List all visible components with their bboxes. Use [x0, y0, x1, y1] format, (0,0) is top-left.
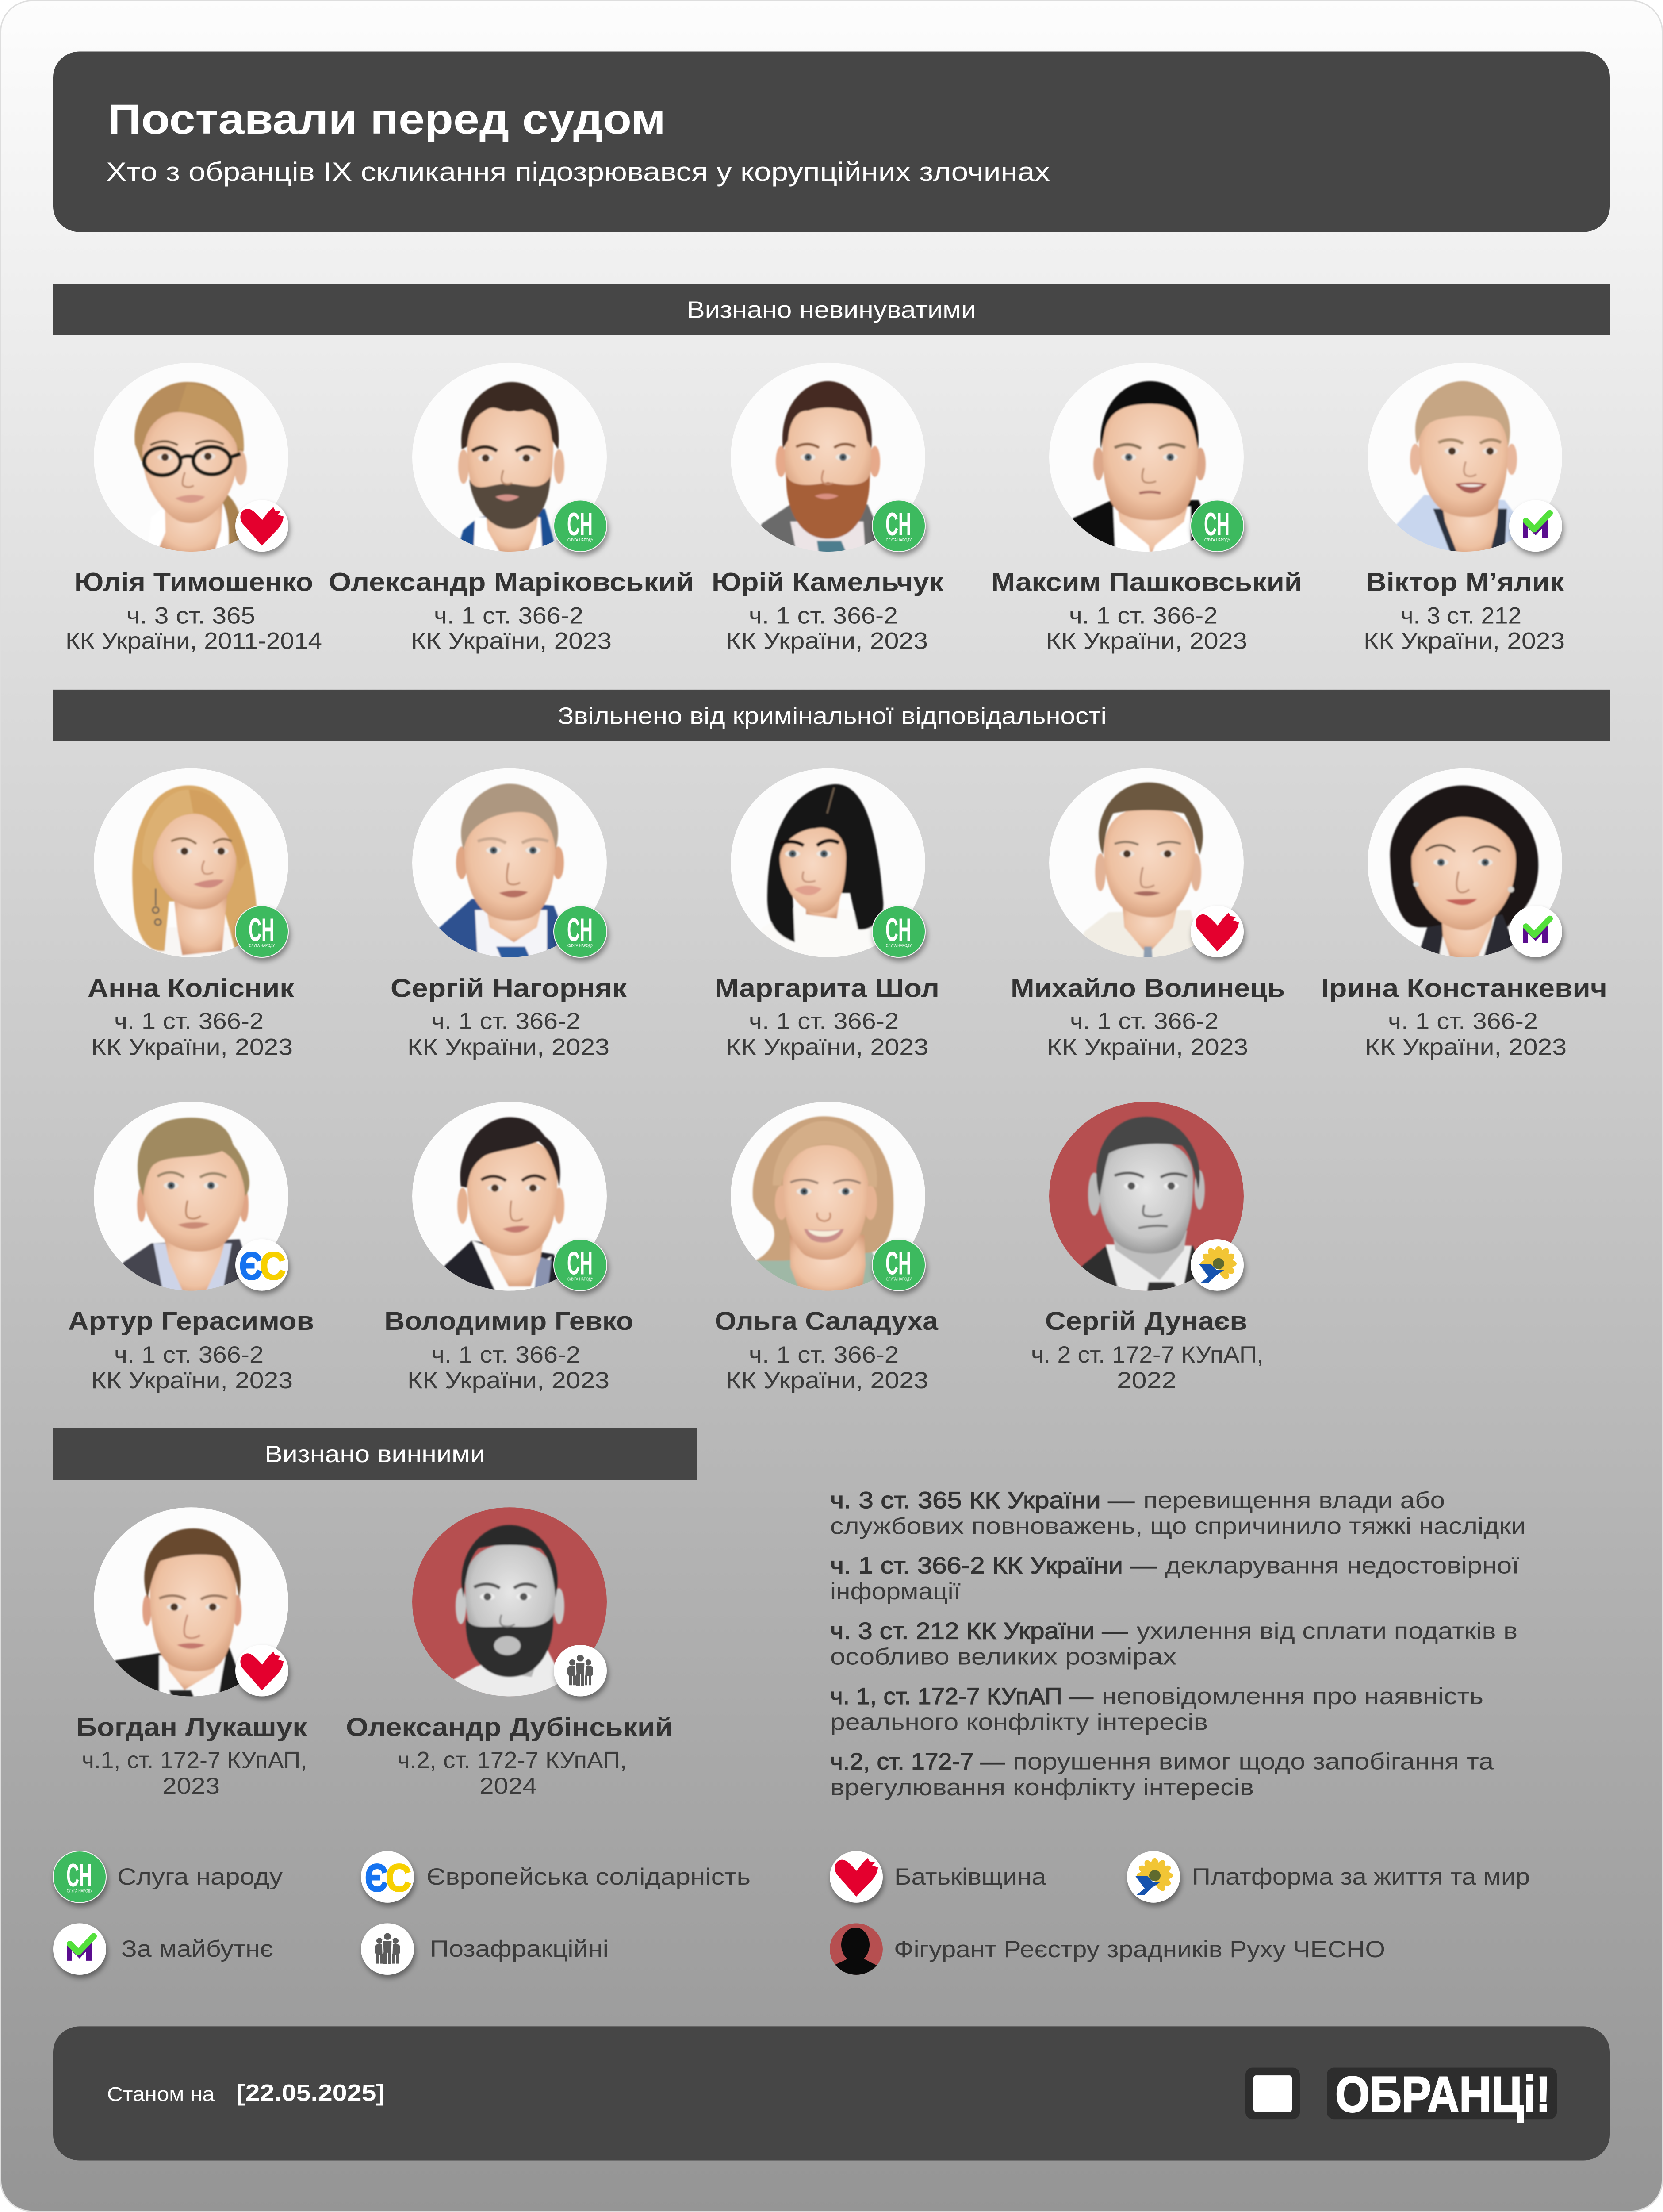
person: Артур Герасимов: [68, 1102, 314, 1394]
header panel: [53, 52, 1610, 232]
party badge: СН: [567, 912, 593, 948]
legend: [53, 1851, 1530, 1976]
portrait: [731, 768, 925, 962]
definition: ч. 3 ст. 212: особливо великих розмірах: [830, 1644, 1176, 1670]
definition: ч. 1, ст. 172-7: [830, 1684, 1483, 1735]
definition: ч. 1, ст. 172-7: реального конфлікту інтересів: [830, 1709, 1208, 1735]
party badge: СН: [1204, 506, 1230, 542]
charge: ч. 1 ст. 366-2: [749, 1009, 899, 1034]
party badge: СЛУГА НАРОДУ: [886, 944, 912, 949]
definition: ч. 1 ст. 366-2: ч. 1 ст. 366-2 КК України —: [830, 1553, 1157, 1579]
person: Юлія Тимошенко: [65, 363, 322, 654]
logo: ОБРАНЦі!: [1245, 2066, 1557, 2123]
charge: ч. 1 ст. 366-2: [749, 603, 898, 629]
portrait: [94, 1102, 288, 1295]
party badge: СЛУГА НАРОДУ: [1204, 538, 1230, 543]
party badge: [1509, 906, 1562, 957]
name: Олександр Дубінський: [346, 1713, 673, 1742]
section band: released from liability: Звільнено від кримінальної відповідальності: [558, 703, 1107, 729]
name: Михайло Волинець: [1011, 973, 1285, 1002]
charge: [407, 1009, 609, 1060]
legend item: Платформа за життя та мир: Платформа за життя та мир: [1192, 1864, 1530, 1890]
charge: [1031, 1342, 1264, 1394]
charge: ч. 1 ст. 366-2: [749, 1342, 899, 1368]
person: Володимир Гевко: [384, 1102, 633, 1394]
definition: ч.2, ст. 172-7: порушення вимог щодо запобігання та: [1013, 1749, 1494, 1774]
legend item: Батьківщина: [830, 1851, 1046, 1903]
legend item: Фігурант Реєстру зрадників: [830, 1923, 1385, 1976]
date value: [22.05.2025]: [237, 2080, 385, 2106]
party badge: [235, 1239, 288, 1291]
charge: ч. 3 ст. 212: [1401, 603, 1521, 629]
charge: КК України, 2023: [1364, 628, 1565, 654]
party badge: [235, 500, 288, 552]
party badge: СЛУГА НАРОДУ: [249, 944, 275, 949]
charge: 2024: [479, 1774, 537, 1799]
portrait: [1368, 363, 1562, 556]
definition: ч. 3 ст. 365: службових повноважень, що спричинило тяжкі наслідки: [830, 1513, 1526, 1539]
person: Олександр Маріковський: [329, 363, 694, 654]
portrait: [1049, 1102, 1244, 1295]
date label: Станом на: [107, 2083, 215, 2105]
definition: ч. 3 ст. 212: ухилення від сплати податків в: [1137, 1618, 1517, 1644]
party badge: СН: [249, 912, 274, 948]
name: Олександр Маріковський: [329, 567, 694, 596]
name: Маргарита Шол: [715, 973, 939, 1002]
charge: ч.1, ст. 172-7 КУпАП,: [82, 1747, 307, 1774]
party badge: [554, 500, 607, 552]
definition: ч. 1, ст. 172-7: неповідомлення про наявність: [1102, 1684, 1483, 1709]
charge: [1047, 1009, 1248, 1060]
party badge: СН: [567, 506, 593, 542]
charge: [82, 1747, 307, 1799]
portrait: [1368, 768, 1562, 962]
definition: ч.2, ст. 172-7: ч.2, ст. 172-7 —: [830, 1749, 1005, 1774]
name: Максим Пашковський: [991, 567, 1302, 596]
charge: ч. 1 ст. 366-2: [434, 603, 583, 629]
party badge: СЛУГА НАРОДУ: [567, 538, 594, 543]
section band: found guilty: Визнано винними: [264, 1441, 485, 1467]
legend item: Європейська солідарність: [361, 1851, 751, 1903]
charge: ч. 1 ст. 366-2: [114, 1009, 264, 1034]
footer panel: [53, 2026, 1610, 2160]
section band: acquitted: [53, 284, 1610, 335]
party badge: СЛУГА НАРОДУ: [567, 1277, 594, 1282]
definition: ч. 3 ст. 365: перевищення влади або: [1143, 1488, 1445, 1513]
name: Сергій Нагорняк: [391, 973, 627, 1002]
person: Сергій Дунаєв: [1031, 1102, 1264, 1394]
charge: КК України, 2023: [1365, 1034, 1567, 1060]
charge: [1365, 1009, 1567, 1060]
name: Анна Колісник: [88, 973, 294, 1002]
portrait: [412, 1507, 607, 1701]
charge: [726, 603, 928, 654]
party badge: СЛУГА НАРОДУ: [886, 1277, 912, 1282]
charge: КК України, 2023: [91, 1368, 293, 1394]
portrait: [94, 1507, 288, 1701]
name: Ольга Саладуха: [715, 1306, 939, 1336]
person: Максим Пашковський: [991, 363, 1302, 654]
name: Богдан Лукашук: [76, 1713, 307, 1742]
charge: ч. 1 ст. 366-2: [431, 1009, 580, 1034]
portrait: [412, 363, 607, 556]
portrait: [412, 768, 607, 962]
portrait: [94, 768, 288, 962]
charge: ч. 1 ст. 366-2: [1070, 1009, 1219, 1034]
charge: КК України, 2023: [726, 1368, 928, 1394]
charge: 2023: [162, 1774, 220, 1799]
charge: ч. 1 ст. 366-2: [1388, 1009, 1538, 1034]
name: Артур Герасимов: [68, 1306, 314, 1336]
name: Ірина Констанкевич: [1321, 973, 1607, 1002]
definition: ч. 3 ст. 365: ч. 3 ст. 365 КК України —: [830, 1488, 1135, 1513]
name: Юлія Тимошенко: [74, 567, 313, 596]
charge: [411, 603, 612, 654]
definition: ч. 1 ст. 366-2: декларування недостовірної: [1165, 1553, 1519, 1579]
charge: [91, 1342, 293, 1394]
person: Михайло Волинець: [1011, 768, 1285, 1060]
charge: 2022: [1117, 1368, 1176, 1394]
party badge: Є: [239, 1244, 262, 1287]
party badge: СН: [885, 1245, 911, 1281]
party badge: СН: [885, 912, 911, 948]
party badge: [235, 1645, 288, 1696]
charge: ч. 2 ст. 172-7 КУпАП,: [1031, 1342, 1264, 1368]
charge: КК України, 2023: [411, 628, 612, 654]
party badge: [872, 500, 925, 552]
portrait: [731, 1102, 925, 1295]
party badge: СЛУГА НАРОДУ: [567, 944, 594, 949]
charge: [407, 1342, 609, 1394]
charge: КК України, 2023: [1047, 1034, 1248, 1060]
party badge: СН: [885, 506, 911, 542]
definition: ч. 1 ст. 366-2: інформації: [830, 1579, 961, 1605]
charge: [726, 1342, 928, 1394]
section band: released from liability: [53, 690, 1610, 741]
charge: КК України, 2011-2014: [65, 628, 322, 654]
charge: КК України, 2023: [407, 1034, 609, 1060]
legend item: Європейська солідарність: Європейська солідарність: [426, 1864, 751, 1890]
legend item: Позафракційні: [361, 1923, 609, 1975]
party badge: [235, 906, 288, 957]
section band: found guilty: [53, 1428, 697, 1480]
party badge: [554, 1239, 607, 1291]
legend item: Європейська солідарність: Є: [365, 1856, 388, 1899]
section band: acquitted: Визнано невинуватими: [687, 297, 976, 323]
subtitle: Хто з обранців IX скликання підозрювався у корупційних злочинах: [106, 157, 1050, 187]
party badge: [1509, 500, 1562, 552]
definition: ч. 3 ст. 212: [830, 1618, 1517, 1670]
legend item: Слуга народу: СН: [66, 1857, 92, 1893]
charge: ч. 1 ст. 366-2: [1069, 603, 1218, 629]
name: Віктор М’ялик: [1366, 567, 1564, 596]
party badge: [1191, 1239, 1244, 1291]
charge: [397, 1747, 627, 1799]
charge: КК України, 2023: [1046, 628, 1247, 654]
legend item: За майбутнє: За майбутнє: [121, 1936, 273, 1962]
charge: ч. 1 ст. 366-2: [114, 1342, 264, 1368]
charge: [65, 603, 322, 654]
person: Маргарита Шол: [715, 768, 939, 1060]
party badge: [872, 1239, 925, 1291]
legend item: Платформа за життя та мир: [1127, 1851, 1530, 1903]
definition: ч.2, ст. 172-7: врегулювання конфлікту інтересів: [830, 1775, 1254, 1801]
party badge: [872, 906, 925, 957]
person: Ірина Констанкевич: [1321, 768, 1607, 1060]
party badge: СН: [567, 1245, 593, 1281]
definition: ч. 3 ст. 212: ч. 3 ст. 212 КК України —: [830, 1618, 1128, 1644]
charge: ч.2, ст. 172-7 КУпАП,: [397, 1747, 627, 1774]
party badge: СЛУГА НАРОДУ: [886, 538, 912, 543]
charge: [91, 1009, 293, 1060]
legend item: Батьківщина: Батьківщина: [894, 1864, 1046, 1890]
portrait: [412, 1102, 607, 1295]
name: Юрій Камельчук: [712, 567, 943, 596]
definition: ч. 1, ст. 172-7: ч. 1, ст. 172-7 КУпАП —: [830, 1684, 1094, 1709]
charge: КК України, 2023: [726, 628, 928, 654]
charge: [1364, 603, 1565, 654]
text block: legal definitions: [830, 1488, 1526, 1801]
legend item: Слуга народу: [53, 1851, 283, 1903]
logo: ОБРАНЦі!: ОБРАНЦі!: [1335, 2066, 1551, 2123]
person: Юрій Камельчук: [712, 363, 943, 654]
party badge: [1191, 906, 1244, 957]
definition: ч. 3 ст. 365: [830, 1488, 1526, 1539]
legend item: Позафракційні: Позафракційні: [430, 1936, 609, 1962]
legend item: Фігурант Реєстру зрадників: Фігурант Реєстру зрадників Руху ЧЕСНО: [894, 1937, 1385, 1962]
legend item: Слуга народу: СЛУГА НАРОДУ: [67, 1889, 93, 1893]
portrait: [1049, 768, 1244, 962]
legend item: За майбутнє: [53, 1923, 273, 1975]
charge: КК України, 2023: [407, 1368, 609, 1394]
name: Володимир Гевко: [384, 1306, 633, 1336]
charge: КК України, 2023: [91, 1034, 293, 1060]
definition: ч.2, ст. 172-7: [830, 1749, 1494, 1801]
person: Олександр Дубінський: [346, 1507, 673, 1799]
charge: КК України, 2023: [726, 1034, 928, 1060]
person: Ольга Саладуха: [715, 1102, 939, 1394]
party badge: [554, 1645, 607, 1696]
definition: ч. 1 ст. 366-2: [830, 1553, 1519, 1605]
person: Віктор М'ялик: [1364, 363, 1565, 654]
party badge: [1191, 500, 1244, 552]
person: Сергій Нагорняк: [391, 768, 627, 1060]
portrait: [1049, 363, 1244, 556]
legend item: Європейська солідарність: С: [386, 1856, 411, 1899]
portrait: [94, 363, 288, 556]
charge: ч. 3 ст. 365: [126, 603, 255, 629]
charge: ч. 1 ст. 366-2: [431, 1342, 580, 1368]
charge: [1046, 603, 1247, 654]
person: Богдан Лукашук: [76, 1507, 307, 1799]
legend item: Слуга народу: Слуга народу: [117, 1864, 283, 1890]
portrait: [731, 363, 925, 556]
title: Поставали перед судом: [107, 96, 666, 143]
party badge: [554, 906, 607, 957]
person: Анна Колісник: [88, 768, 294, 1060]
name: Сергій Дунаєв: [1045, 1306, 1247, 1336]
party badge: С: [260, 1244, 286, 1287]
charge: [726, 1009, 928, 1060]
